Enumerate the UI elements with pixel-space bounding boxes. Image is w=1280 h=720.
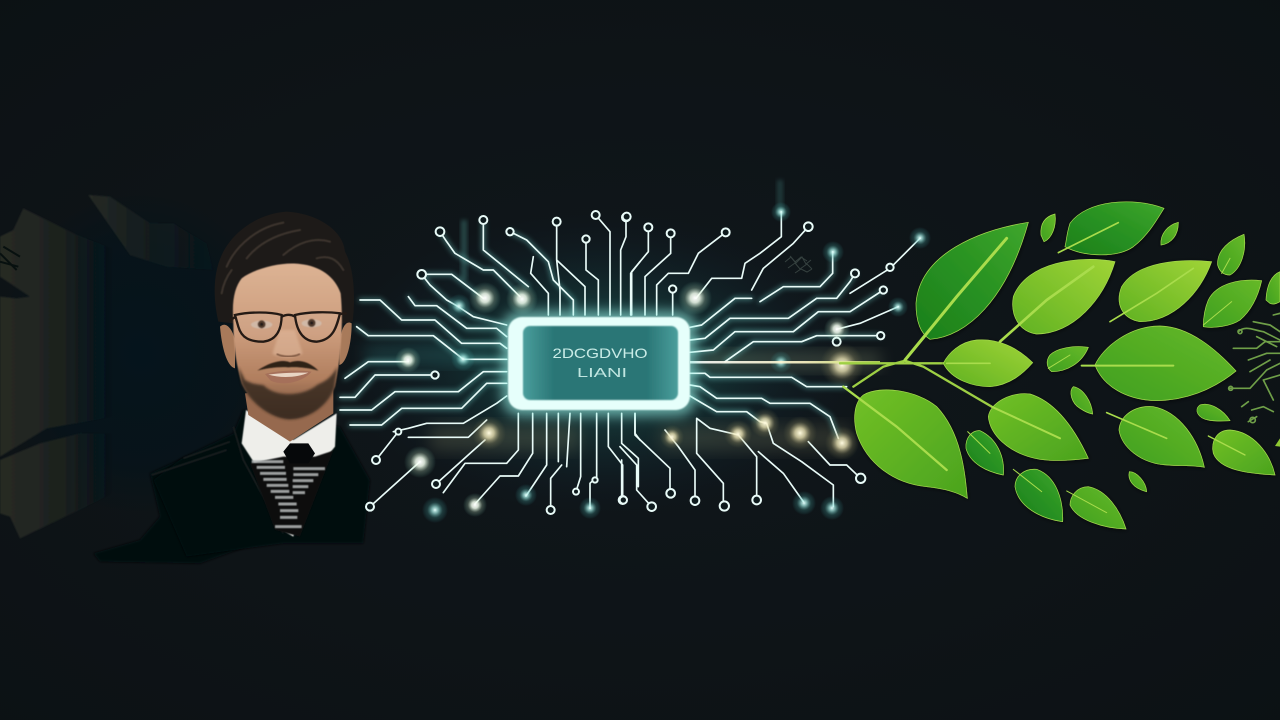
shirt dark streaks <box>250 451 333 537</box>
lapel edges <box>152 427 283 533</box>
left nodes <box>366 211 630 514</box>
moustache <box>257 361 318 371</box>
central chip <box>502 311 696 416</box>
circuit traces, right half <box>620 212 920 511</box>
chip panel <box>523 326 678 400</box>
brush strokes behind portrait <box>0 193 287 563</box>
mouth and teeth <box>265 371 312 383</box>
nose shading <box>273 330 303 357</box>
leaf midribs <box>843 223 1245 513</box>
bottom-left traces <box>370 396 640 510</box>
branch stems <box>840 318 992 407</box>
shirt and collar <box>242 410 337 537</box>
eyes <box>251 319 322 329</box>
circuit traces, left half <box>340 211 640 514</box>
portrait of man in glasses <box>152 212 370 557</box>
leaves <box>855 202 1280 529</box>
beard stubble <box>238 367 337 419</box>
necktie knot <box>283 443 315 463</box>
central chip: LIANI <box>577 365 627 380</box>
jacket <box>153 410 370 557</box>
lower-right traces <box>620 373 861 507</box>
neck <box>245 383 333 442</box>
glowing nodes <box>395 202 931 523</box>
chip outer glow <box>502 311 696 416</box>
left traces <box>340 220 573 425</box>
green circuit fragment <box>1229 313 1280 423</box>
right nodes <box>620 213 894 511</box>
ears <box>220 325 235 368</box>
teal glow behind circuit <box>340 180 880 513</box>
face <box>233 263 342 419</box>
left trace glow <box>340 220 573 425</box>
speckled circuit cluster <box>785 256 812 273</box>
upper-right traces <box>632 212 920 362</box>
glasses <box>230 312 347 342</box>
leaf at right edge <box>1275 438 1280 447</box>
leaf branch <box>840 202 1280 529</box>
right trace glow <box>690 252 883 438</box>
hair highlights <box>222 223 343 293</box>
top traces <box>531 215 640 315</box>
chip label: 2DCGDVHO <box>552 345 648 361</box>
hair back <box>215 212 354 323</box>
chip frame <box>508 317 690 410</box>
